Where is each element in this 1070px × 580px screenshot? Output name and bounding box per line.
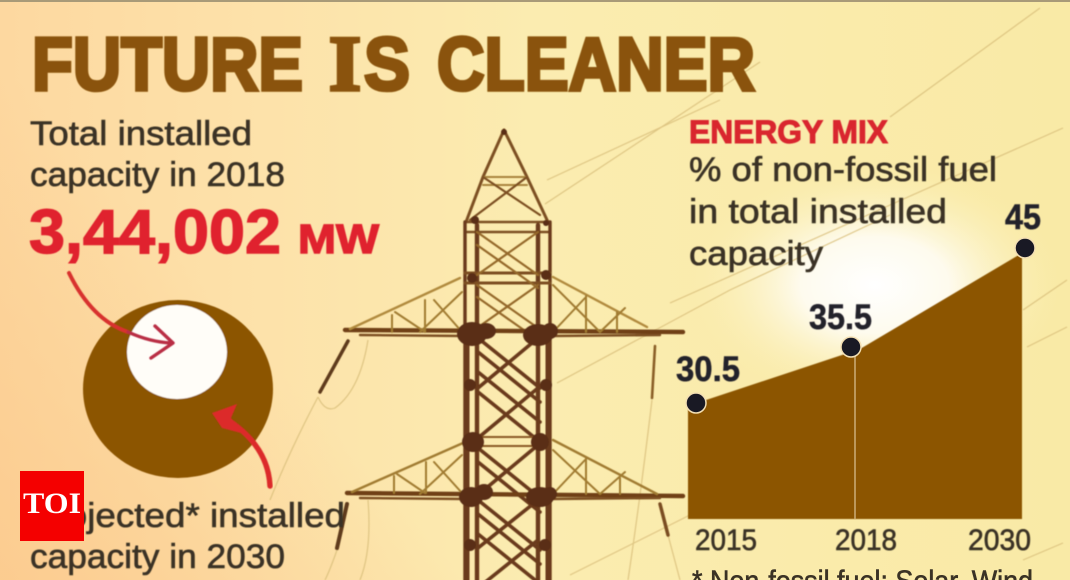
heading: energy mix: ENERGY MIX [689, 114, 889, 150]
lower cross arm [347, 440, 683, 499]
data labels: 35.5 [809, 298, 872, 337]
data labels: 45 [1005, 198, 1041, 237]
data points [686, 238, 1035, 413]
title: S [364, 22, 410, 106]
title: I [329, 20, 361, 107]
arrow: to 2030 circle [212, 404, 270, 486]
data labels: 30.5 [676, 350, 740, 389]
logo: TOI [20, 471, 84, 541]
tower peak [465, 130, 550, 232]
text: total installed capacity in 2018: Total installed [30, 115, 252, 153]
logo: TOI: TOI [23, 487, 81, 520]
text: projected installed capacity in 2030: capacity in 2030 [30, 538, 285, 576]
2018 divider [854, 354, 856, 519]
arrow: to 2018 circle [69, 273, 173, 358]
text: projected installed capacity in 2030 [30, 497, 345, 576]
title: FUTURE [32, 22, 303, 106]
tower bracing [477, 232, 538, 340]
year labels [695, 524, 1031, 557]
tower mast [465, 222, 550, 580]
title: CLEANER [437, 22, 755, 106]
chart area [688, 253, 1022, 519]
transmission tower [320, 129, 683, 580]
area chart: non-fossil share [676, 198, 1041, 557]
figure: 3,44,002 MW [29, 198, 379, 267]
upper cross arm [345, 277, 683, 336]
figure: 3,44,002 MW: MW [298, 216, 379, 262]
insulators [320, 341, 668, 548]
year labels: 2030 [968, 524, 1031, 557]
data labels [676, 198, 1041, 389]
text: total installed capacity in 2018 [30, 115, 285, 194]
title [32, 20, 755, 107]
year labels: 2018 [835, 524, 897, 557]
text: energy mix description: capacity [689, 235, 823, 273]
text: projected installed capacity in 2030: Projected* installed [30, 497, 345, 535]
tower joints [457, 129, 558, 551]
text: energy mix description: in total installed [689, 193, 947, 231]
power lines [270, 8, 1067, 580]
text: energy mix description [689, 151, 997, 273]
figure: 3,44,002 MW: 3,44,002 [29, 198, 281, 267]
text: total installed capacity in 2018: capacity in 2018 [30, 156, 285, 194]
year labels: 2015 [695, 524, 757, 557]
circle chart: 2018 vs 2030 capacity [83, 300, 273, 478]
text: energy mix description: % of non-fossil fuel [689, 151, 997, 189]
